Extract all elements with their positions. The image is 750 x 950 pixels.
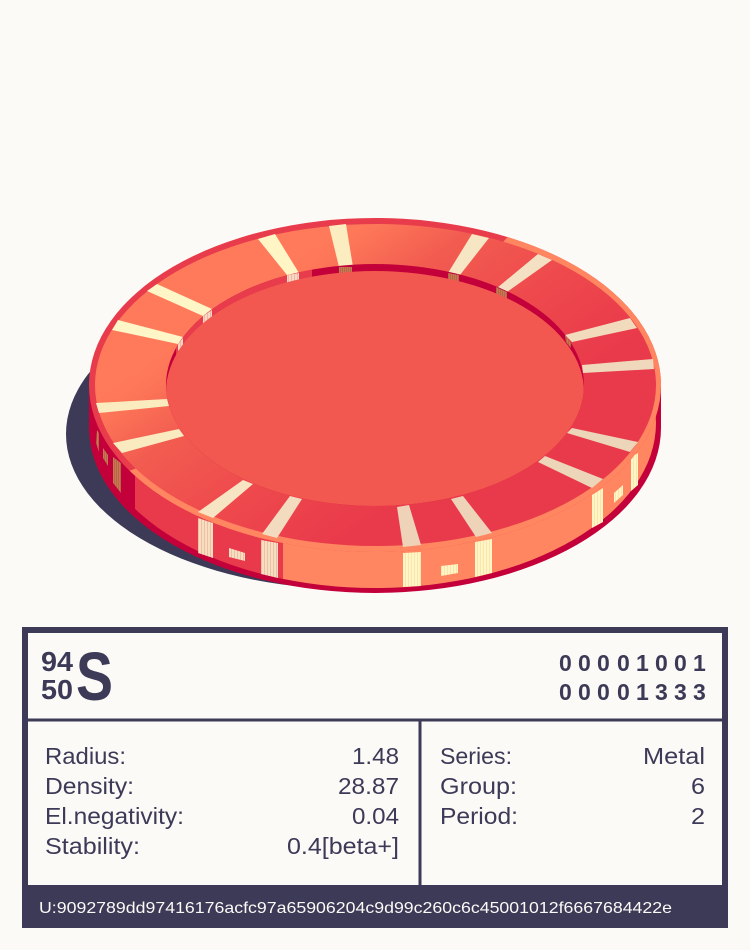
data panel	[22, 630, 728, 928]
side wall markings	[96, 430, 638, 587]
left property list	[45, 743, 399, 859]
left property list: 1.48	[352, 743, 399, 769]
inner recess wall	[160, 260, 590, 510]
rim	[89, 218, 661, 552]
centre disc	[166, 271, 584, 513]
coin side wall	[135, 416, 656, 588]
footer hash: U:9092789dd97416176acfc97a65906204c9d99c260c6c45001012f6667684422e	[39, 900, 672, 917]
right property list: Metal	[643, 743, 705, 769]
horizontal divider	[28, 718, 722, 722]
left property list: Radius:	[45, 743, 126, 769]
right property list: Period:	[440, 803, 518, 829]
binary code rows	[559, 650, 706, 705]
right property list: Series:	[440, 743, 512, 769]
left property list: 28.87	[338, 773, 399, 799]
right property list: 6	[691, 773, 705, 799]
infographic canvas	[22, 218, 728, 928]
coin	[89, 218, 663, 600]
panel frame	[25, 630, 725, 925]
binary code rows: 00001001	[559, 650, 706, 676]
element symbol block: 94	[41, 646, 73, 677]
right property list	[440, 743, 705, 829]
ring face	[95, 224, 656, 546]
element symbol block: S	[76, 638, 113, 715]
ring spokes	[96, 224, 654, 547]
coin body base	[89, 385, 661, 593]
left property list: Stability:	[45, 833, 140, 859]
drop shadow	[66, 279, 636, 589]
element symbol block	[41, 638, 113, 715]
element symbol block: 50	[41, 674, 73, 705]
left property list: 0.4[beta+]	[287, 833, 399, 859]
right property list: 2	[691, 803, 705, 829]
left property list: 0.04	[352, 803, 399, 829]
vertical divider	[418, 719, 422, 885]
left property list: El.negativity:	[45, 803, 184, 829]
right property list: Group:	[440, 773, 517, 799]
left property list: Density:	[45, 773, 134, 799]
footer bar	[22, 885, 728, 928]
binary code rows: 00001333	[559, 679, 706, 705]
